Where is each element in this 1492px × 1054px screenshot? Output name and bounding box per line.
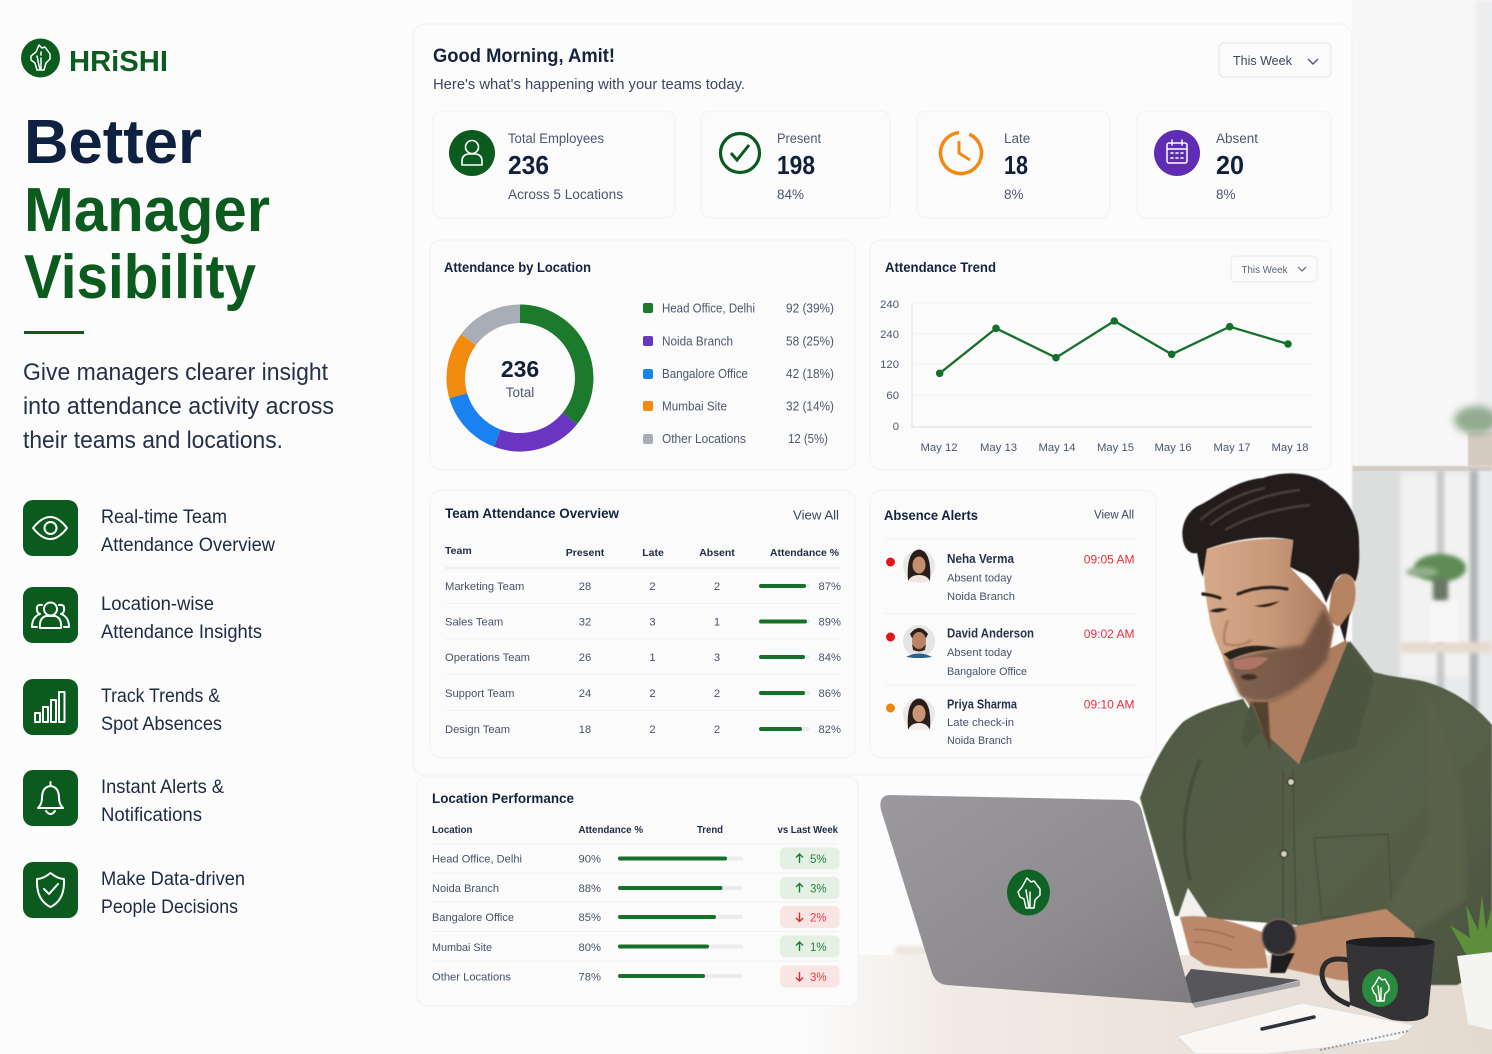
axis labels: May 15 — [1097, 442, 1134, 454]
alert: Neha Verma — [886, 550, 1135, 603]
feature: location insights — [23, 587, 262, 643]
table rows: Design Team — [445, 724, 510, 736]
location table header: vs Last Week — [778, 824, 838, 836]
axis labels: May 17 — [1213, 442, 1251, 454]
table rows: 2 — [649, 581, 656, 593]
panel: attendance by location: Attendance by Location — [444, 259, 591, 275]
trend dropdown: This Week — [1242, 264, 1288, 276]
panel: absence alerts: View All — [1094, 510, 1134, 522]
table rows: 82% — [818, 724, 841, 736]
feature: real-time overview: Attendance Overview — [101, 535, 275, 556]
attendance bars — [759, 584, 810, 731]
greeting: Here's what's happening with your teams today. — [433, 76, 745, 93]
change pills: 5% — [810, 854, 827, 866]
title: Visibility — [24, 243, 256, 312]
feature: trends: Spot Absences — [101, 714, 222, 735]
feature: trends: Track Trends & — [101, 686, 220, 707]
table rows: 89% — [818, 616, 841, 628]
stat card: total employees: 236 — [508, 150, 549, 180]
title: Manager — [24, 176, 270, 245]
change pills: 3% — [810, 883, 827, 895]
trend dropdown — [1231, 256, 1317, 282]
intro paragraph: Give managers clearer insight — [23, 359, 328, 386]
axis labels: May 12 — [920, 442, 958, 454]
location rows: 78% — [578, 972, 601, 984]
table rows: 3 — [649, 616, 656, 628]
panel: location performance — [417, 777, 858, 1006]
table rows: 2 — [714, 688, 720, 700]
alert: Priya Sharma: Priya Sharma — [947, 698, 1018, 712]
table rows: 87% — [818, 581, 841, 593]
feature: decisions: People Decisions — [101, 897, 238, 918]
table rows: 84% — [818, 652, 841, 664]
change pills: 3% — [810, 972, 827, 984]
axis labels: May 14 — [1038, 442, 1076, 454]
legend: Mumbai Site — [662, 400, 727, 414]
greeting — [433, 45, 745, 93]
axis labels: 60 — [886, 390, 899, 402]
legend: 92 (39%) — [786, 302, 834, 316]
alert: Priya Sharma: Noida Branch — [947, 735, 1012, 747]
forearm and hand — [1180, 909, 1420, 985]
legend: 12 (5%) — [788, 432, 828, 446]
table header: Late — [642, 547, 664, 559]
intro paragraph: into attendance activity across — [23, 393, 334, 420]
feature: alerts: Notifications — [101, 805, 202, 826]
location rows: Noida Branch — [432, 883, 499, 895]
alert: Priya Sharma: Late check-in — [947, 717, 1014, 729]
table header — [445, 545, 840, 559]
watch — [1262, 919, 1296, 973]
trend bars — [618, 856, 743, 978]
feature: location insights: Attendance Insights — [101, 622, 262, 643]
feature: real-time overview: Real-time Team — [101, 507, 227, 528]
axis labels: May 18 — [1271, 442, 1309, 454]
line chart — [936, 317, 1292, 377]
panel: attendance trend: Attendance Trend — [885, 259, 996, 275]
stat card: absent: Absent — [1216, 131, 1258, 146]
notebook and pen — [1177, 1003, 1414, 1054]
location rows: Bangalore Office — [432, 912, 514, 924]
table rows: 2 — [649, 688, 656, 700]
legend: Bangalore Office — [662, 367, 748, 381]
table rows: 32 — [579, 616, 591, 628]
donut chart — [456, 314, 584, 442]
feature: decisions: Make Data-driven — [101, 869, 245, 890]
stat card: absent — [1137, 111, 1331, 218]
stat card: absent: 20 — [1216, 150, 1244, 180]
stat card: late: Late — [1004, 131, 1030, 146]
hair — [1182, 473, 1359, 603]
feature: alerts: Instant Alerts & — [101, 777, 224, 798]
table rows: 28 — [579, 581, 591, 593]
stat card: late: 18 — [1004, 150, 1028, 180]
feature: decisions — [23, 862, 245, 918]
intro paragraph: their teams and locations. — [23, 427, 283, 454]
legend: Head Office, Delhi — [662, 302, 755, 316]
alert: David Anderson: David Anderson — [947, 626, 1034, 640]
alert: David Anderson: Bangalore Office — [947, 666, 1027, 678]
laptop logo — [1007, 870, 1050, 916]
alert: David Anderson: Absent today — [947, 647, 1012, 659]
collar — [1241, 641, 1374, 764]
alert: Neha Verma: 09:05 AM — [1084, 552, 1135, 566]
table header: Absent — [699, 547, 735, 559]
axis labels: 240 — [880, 329, 899, 341]
alert: Priya Sharma — [886, 698, 1135, 747]
title: Better — [24, 108, 202, 177]
axis labels: May 16 — [1154, 442, 1192, 454]
panel: location performance: Location Performance — [432, 790, 574, 806]
table rows — [445, 581, 841, 736]
dashboard panel — [413, 24, 1352, 775]
axis labels: 0 — [893, 421, 899, 433]
table rows: 18 — [579, 724, 591, 736]
head — [1203, 539, 1356, 702]
location rows: 80% — [578, 942, 601, 954]
alert: Priya Sharma: 09:10 AM — [1084, 698, 1135, 712]
title — [24, 108, 270, 312]
alert: Neha Verma: Neha Verma — [947, 552, 1015, 566]
stat card: total employees — [433, 111, 675, 218]
stat card: present — [701, 111, 890, 218]
stat card: present: 198 — [777, 150, 815, 180]
stat card: present: 84% — [777, 187, 804, 202]
donut total: Total — [506, 385, 534, 400]
location table header: Attendance % — [578, 824, 644, 836]
greeting: Good Morning, Amit! — [433, 45, 615, 67]
feature: real-time overview — [23, 500, 275, 556]
table rows: 2 — [714, 724, 720, 736]
panel: attendance by location — [430, 240, 855, 470]
stat card: late: 8% — [1004, 187, 1024, 202]
table rows: Marketing Team — [445, 581, 524, 593]
panel: team attendance overview: View All — [793, 508, 839, 522]
donut total: 236 — [501, 356, 539, 382]
panel: absence alerts: Absence Alerts — [884, 507, 978, 523]
neck — [1245, 640, 1350, 764]
legend: Other Locations — [662, 432, 746, 446]
legend: 32 (14%) — [786, 400, 834, 414]
stat card: absent: 8% — [1216, 187, 1236, 202]
table rows: Support Team — [445, 688, 514, 700]
table header: Present — [566, 547, 605, 559]
location rows: 85% — [578, 912, 601, 924]
table rows: Sales Team — [445, 616, 503, 628]
axis labels — [880, 299, 1309, 454]
feature list — [23, 500, 275, 918]
axis labels: 120 — [880, 359, 899, 371]
stat card: total employees: Total Employees — [508, 131, 604, 146]
table rows: 2 — [649, 724, 656, 736]
table rows: 3 — [714, 652, 720, 664]
alert: David Anderson — [886, 625, 1135, 678]
mug logo — [1362, 969, 1398, 1007]
table header: Team — [445, 545, 472, 557]
alert: David Anderson: 09:02 AM — [1084, 627, 1135, 641]
legend — [643, 302, 834, 446]
feature: alerts — [23, 770, 224, 826]
axis labels: 240 — [880, 299, 899, 311]
table rows: 24 — [579, 688, 591, 700]
table rows: 1 — [714, 616, 720, 628]
table rows: 1 — [649, 652, 656, 664]
table rows: Operations Team — [445, 652, 530, 664]
laptop — [880, 795, 1300, 1008]
legend: Noida Branch — [662, 334, 733, 348]
intro paragraph — [23, 359, 334, 454]
week dropdown: This Week — [1233, 54, 1293, 68]
axis labels: May 13 — [980, 442, 1017, 454]
location rows: 90% — [578, 854, 601, 866]
legend: 42 (18%) — [786, 367, 834, 381]
table rows: 26 — [579, 652, 591, 664]
location rows — [432, 854, 601, 984]
feature: trends — [23, 679, 222, 735]
stat card: late — [917, 111, 1110, 218]
person — [1140, 473, 1492, 985]
panel: attendance trend — [870, 240, 1331, 470]
stat card: total employees: Across 5 Locations — [508, 187, 623, 202]
legend: 58 (25%) — [786, 334, 834, 348]
week dropdown — [1219, 43, 1331, 77]
alert: Neha Verma: Noida Branch — [947, 591, 1015, 603]
location table header: Trend — [697, 824, 723, 836]
potted plant — [1450, 895, 1492, 1030]
stat card: present: Present — [777, 131, 821, 146]
blurred office background — [895, 0, 1492, 956]
location rows: Other Locations — [432, 972, 511, 984]
location rows: 88% — [578, 883, 601, 895]
shirt — [1140, 641, 1492, 985]
desk — [800, 955, 1492, 1054]
brand logo: HRiSHI — [69, 46, 168, 78]
table rows: 2 — [714, 581, 720, 593]
location rows: Head Office, Delhi — [432, 854, 522, 866]
feature: location insights: Location-wise — [101, 594, 214, 615]
change pills: 2% — [810, 912, 827, 924]
location rows: Mumbai Site — [432, 942, 492, 954]
location table header: Location — [432, 824, 472, 836]
donut total — [501, 356, 539, 400]
change pills — [780, 848, 840, 988]
alert: Neha Verma: Absent today — [947, 572, 1012, 584]
coffee mug — [1322, 937, 1435, 1021]
change pills: 1% — [810, 942, 827, 954]
location table header — [432, 824, 838, 836]
table rows: 86% — [818, 688, 841, 700]
table header: Attendance % — [770, 547, 840, 559]
panel: team attendance overview — [430, 490, 855, 758]
panel: absence alerts — [870, 490, 1156, 758]
panel: team attendance overview: Team Attendance Overview — [445, 505, 619, 521]
brand logo — [21, 38, 168, 78]
